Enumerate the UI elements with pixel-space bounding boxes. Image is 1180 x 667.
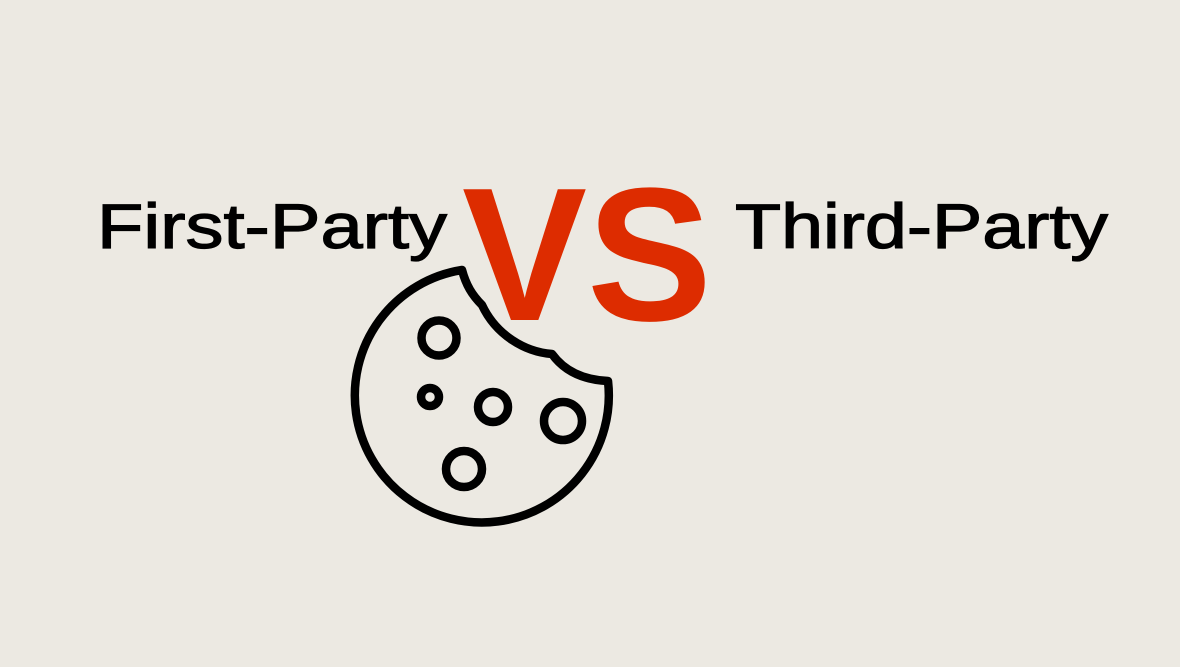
heading: Third-Party: Third-Party: [735, 192, 1109, 262]
icon: bitten cookie: [355, 270, 609, 522]
heading: First-Party: First-Party: [97, 192, 448, 262]
heading: VS: VS: [462, 149, 712, 361]
